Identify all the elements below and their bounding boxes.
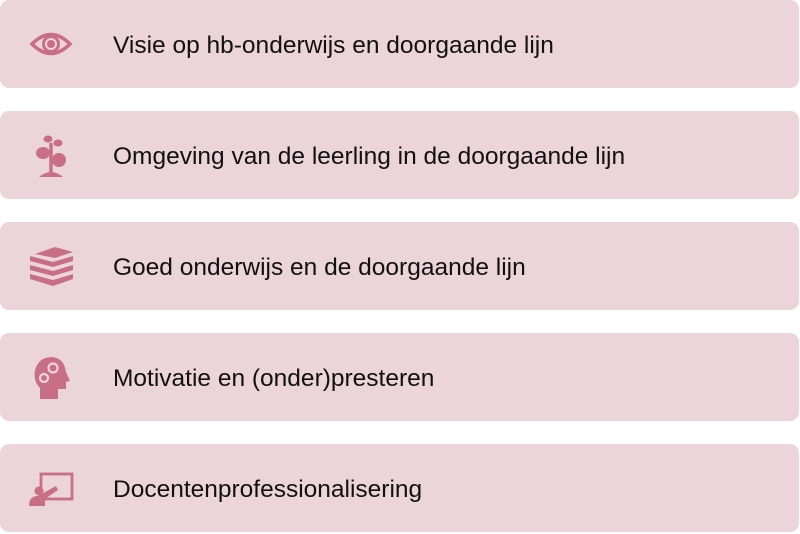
icon: teacher board (29, 472, 74, 506)
panel: motivatie (0, 333, 799, 421)
text: Visie op hb-onderwijs en doorgaande lijn (113, 32, 554, 59)
icon: eye (30, 32, 72, 56)
panel: docenten (0, 444, 799, 532)
text: Omgeving van de leerling in de doorgaande lijn (113, 143, 625, 170)
icon: books (30, 247, 73, 286)
panel: omgeving (0, 111, 799, 199)
panel: visie (0, 0, 799, 88)
text: Goed onderwijs en de doorgaande lijn (113, 254, 526, 281)
icon: plant (36, 136, 66, 177)
panel: goed onderwijs (0, 222, 799, 310)
icon: head gears (34, 357, 70, 399)
text: Motivatie en (onder)presteren (113, 365, 434, 392)
text: Docentenprofessionalisering (113, 476, 422, 503)
